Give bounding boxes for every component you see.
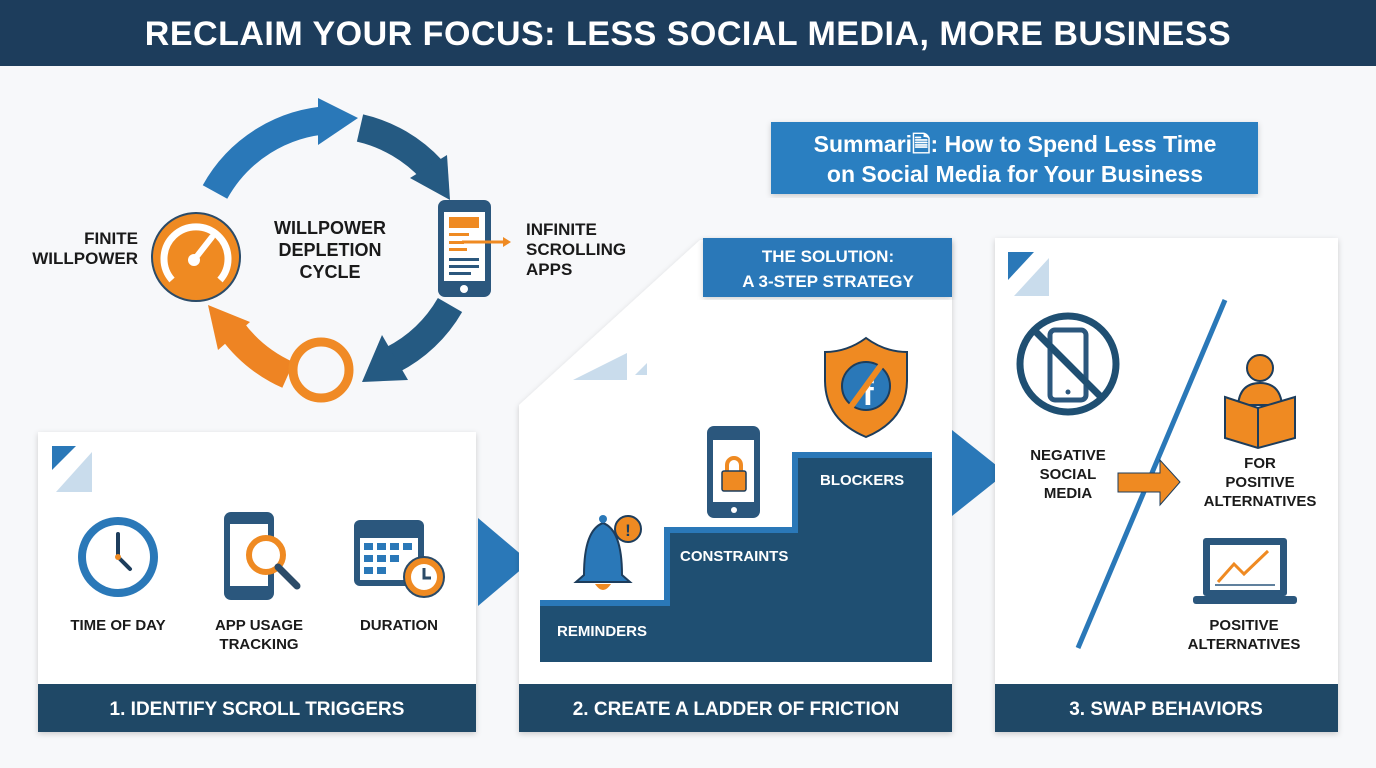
icon: calendar with clock	[354, 520, 444, 597]
label: negative social media: NEGATIVE	[1030, 447, 1106, 464]
icon: gauge	[152, 213, 240, 301]
arrow: bottom right navy	[362, 305, 450, 382]
label: for positive alternatives: ALTERNATIVES	[1204, 493, 1316, 510]
footer: 3. SWAP BEHAVIORS	[1069, 699, 1263, 720]
arrow: top blue	[215, 98, 358, 192]
panel 3: swap behaviors	[995, 238, 1338, 732]
labels	[70, 617, 438, 653]
panel 1: identify scroll triggers	[38, 432, 476, 732]
step labels	[557, 472, 904, 640]
icon: bell	[576, 515, 641, 590]
icon: laptop growth chart	[1193, 538, 1297, 604]
arrow: swap	[1118, 460, 1180, 505]
footer	[38, 684, 476, 732]
summary box: Summari🗎: How to Spend Less Time	[814, 131, 1216, 157]
corner accent	[52, 446, 92, 492]
label: infinite scrolling apps: SCROLLING	[526, 240, 626, 259]
label: negative social media	[1030, 447, 1106, 502]
divider slash	[1078, 300, 1225, 648]
step labels: REMINDERS	[557, 623, 647, 640]
summary box	[771, 122, 1258, 194]
label: cycle name: CYCLE	[299, 262, 361, 282]
summary box: on Social Media for Your Business	[827, 161, 1203, 187]
icon: locked phone	[707, 426, 760, 518]
solution label: THE SOLUTION:	[762, 247, 894, 266]
footer	[995, 684, 1338, 732]
label: cycle name: WILLPOWER	[274, 218, 386, 238]
willpower depletion cycle diagram	[32, 98, 626, 398]
icon: no phone	[1020, 316, 1116, 412]
stairs	[540, 455, 932, 662]
label: infinite scrolling apps: APPS	[526, 260, 572, 279]
icon: shield blocking facebook	[825, 338, 907, 437]
label: for positive alternatives: FOR	[1244, 455, 1276, 472]
icon: clock	[78, 517, 158, 597]
arrow: bottom left orange	[208, 305, 288, 375]
icon: shield blocking facebook: f	[862, 375, 874, 413]
label: infinite scrolling apps	[526, 220, 626, 279]
icon: app tracking phone with magnifier	[224, 512, 297, 600]
label: positive alternatives: POSITIVE	[1209, 617, 1279, 634]
arrow: chevron 1 to 2	[478, 518, 530, 606]
step labels: CONSTRAINTS	[680, 548, 788, 565]
step labels: BLOCKERS	[820, 472, 904, 489]
label: cycle name: DEPLETION	[278, 240, 382, 260]
label: positive alternatives	[1188, 617, 1300, 653]
label: negative social media: MEDIA	[1044, 485, 1092, 502]
labels: DURATION	[360, 617, 438, 634]
title bar: RECLAIM YOUR FOCUS: LESS SOCIAL MEDIA, MORE BUSINESS	[145, 15, 1231, 53]
arrow: top right navy	[360, 128, 450, 200]
label: for positive alternatives	[1204, 455, 1316, 510]
icon: bell: !	[625, 521, 631, 540]
labels: TIME OF DAY	[70, 617, 166, 634]
title bar	[0, 0, 1376, 66]
label: cycle name	[274, 218, 386, 282]
footer	[519, 684, 952, 732]
label: positive alternatives: ALTERNATIVES	[1188, 636, 1300, 653]
label: negative social media: SOCIAL	[1040, 466, 1096, 483]
solution label: A 3-STEP STRATEGY	[742, 272, 914, 291]
arrow: chevron 2 to 3	[952, 430, 1006, 516]
panel 2: ladder of friction	[519, 240, 952, 732]
icon: phone with scrolling feed	[438, 200, 511, 297]
label: finite willpower: WILLPOWER	[32, 249, 138, 268]
label: for positive alternatives: POSITIVE	[1225, 474, 1295, 491]
label: finite willpower	[32, 229, 138, 268]
icon: small loop ring	[293, 342, 349, 398]
labels: APP USAGE	[215, 617, 303, 634]
label: finite willpower: FINITE	[84, 229, 138, 248]
icon: reader	[1225, 355, 1295, 448]
label: infinite scrolling apps: INFINITE	[526, 220, 597, 239]
labels: TRACKING	[219, 636, 299, 653]
footer: 2. CREATE A LADDER OF FRICTION	[573, 699, 899, 720]
corner accent	[1008, 252, 1049, 296]
solution label	[703, 238, 952, 297]
corner accent	[573, 353, 647, 380]
footer: 1. IDENTIFY SCROLL TRIGGERS	[110, 699, 404, 720]
